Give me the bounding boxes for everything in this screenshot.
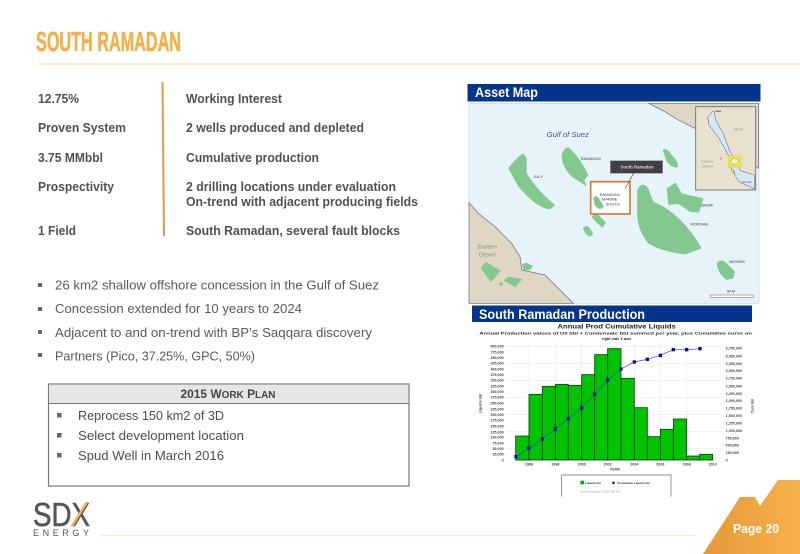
oil fields (481, 147, 735, 287)
left axis labels: 300,000 (490, 390, 504, 394)
key facts table: 12.75% (38, 92, 79, 106)
line: cumulative liquids (514, 347, 702, 458)
left axis labels: 25,000 (492, 453, 504, 457)
bullet list: Concession extended for 10 years to 2024 (55, 301, 302, 316)
left axis labels: 150,000 (490, 425, 504, 429)
key facts table: Proven System (38, 121, 126, 135)
chart title: Annual Prod Cumulative Liquids (557, 324, 677, 330)
right axis labels (726, 346, 742, 462)
sea label: Gulf of Suez (547, 130, 589, 139)
highlight box: Ramadan Marine South (591, 182, 630, 214)
key facts table: Prospectivity (38, 180, 114, 194)
grid (507, 343, 722, 460)
panel: 2015 work plan: Reprocess 150 km2 of 3D (78, 409, 224, 423)
bullet list (38, 278, 379, 364)
work plan heading: 2015 WORK PLAN (180, 387, 276, 401)
right axis labels: 500,000 (726, 444, 739, 448)
asset map (469, 103, 759, 303)
key facts table: 2 wells produced and depleted (186, 121, 364, 135)
right axis labels: 3,750,000 (726, 346, 742, 350)
inset map: Red Sea (742, 182, 752, 184)
right axis labels: 750,000 (726, 436, 739, 440)
axis titles: Cum bbl (751, 399, 755, 413)
left axis labels: 175,000 (490, 419, 504, 423)
left axis labels: 425,000 (490, 362, 504, 366)
title: SOUTH RAMADAN (36, 26, 181, 57)
production chart (479, 324, 755, 497)
scale bar: 5KM (727, 289, 735, 294)
field labels: RAMADAN (581, 156, 601, 161)
asset map heading: Asset Map (475, 85, 538, 100)
left axis labels: 75,000 (492, 441, 504, 445)
right axis labels: 250,000 (726, 451, 739, 455)
left axis labels: 375,000 (490, 373, 504, 377)
x axis labels: 2000 (578, 462, 586, 466)
axis titles: Liquids bbl (479, 394, 483, 413)
vertical orange divider (162, 82, 165, 236)
land: Eastern Desert: Eastern (478, 244, 497, 250)
right axis labels: 1,500,000 (726, 414, 742, 418)
field labels (533, 156, 745, 264)
inset map: Desert (702, 165, 713, 169)
left axis labels: 800,000 (490, 345, 504, 349)
key facts table: South Ramadan, several fault blocks (186, 224, 400, 238)
right axis labels: 0 (726, 458, 728, 462)
field labels: JULY (533, 174, 543, 179)
callout: South Ramadan: South Ramadan (621, 164, 654, 169)
left axis labels: 275,000 (490, 396, 504, 400)
x axis labels: 2006 (656, 462, 664, 466)
right axis labels: 3,500,000 (726, 355, 742, 359)
production heading (472, 306, 752, 322)
legend: Cumulative Liquids bbl (617, 481, 650, 485)
highlight box: Ramadan Marine South: SOUTH (606, 201, 620, 206)
asset map heading (468, 84, 760, 102)
right axis labels: 2,250,000 (726, 392, 742, 396)
chart title: Annual Production values of Oil bbl + Condensate bbl summed per year, plus Cumulative curve on (479, 332, 753, 336)
inset map (696, 107, 756, 190)
logo: SDX Energy: ENERGY (33, 528, 89, 538)
bars: annual production (516, 349, 713, 460)
land: Sinai (648, 103, 758, 168)
land: Eastern Desert: Desert (479, 253, 496, 259)
legend: Liquids bbl (585, 481, 601, 485)
right axis labels: 1,000,000 (726, 429, 742, 433)
right axis labels: 3,000,000 (726, 369, 742, 373)
land: Eastern Desert (469, 203, 573, 303)
panel: 2015 work plan (48, 384, 409, 486)
field labels: NESSIM (729, 259, 745, 264)
left axis labels: 325,000 (490, 384, 504, 388)
x axis labels: YEAR (610, 468, 620, 472)
left axis labels: 125,000 (490, 430, 504, 434)
panel: 2015 work plan: Spud Well in March 2016 (78, 449, 224, 463)
right axis labels: 1,250,000 (726, 422, 742, 426)
x axis labels: 2004 (630, 462, 639, 466)
left axis labels (490, 345, 504, 462)
right axis labels: 2,500,000 (726, 385, 742, 389)
callout: South Ramadan (610, 161, 663, 189)
chart title (479, 324, 753, 341)
panel: 2015 work plan: Select development location (78, 429, 244, 443)
left axis labels: 200,000 (490, 413, 504, 417)
key facts table: 2 drilling locations under evaluation (186, 180, 396, 194)
right axis labels: 1,750,000 (726, 407, 742, 411)
left axis labels: 50,000 (492, 447, 504, 451)
left axis labels: 400,000 (490, 367, 504, 371)
x axis labels: 2002 (604, 462, 612, 466)
highlight box: Ramadan Marine South: MARINE (602, 197, 618, 202)
key facts table: On-trend with adjacent producing fields (186, 195, 418, 209)
page number corner (703, 480, 800, 554)
x axis labels: 2008 (683, 462, 691, 466)
left axis labels: 225,000 (490, 407, 504, 411)
key facts table: 3.75 MMbbl (38, 151, 103, 165)
bullet list: 26 km2 shallow offshore concession in the Gulf of Suez (55, 278, 379, 292)
inset map: Eastern (701, 159, 714, 163)
inset map: Sinai (734, 127, 743, 132)
key facts table (38, 92, 418, 238)
left axis labels: 250,000 (490, 401, 504, 405)
right axis labels: 2,000,000 (726, 399, 742, 403)
field labels: BADRI (701, 202, 714, 207)
legend (562, 475, 671, 497)
production heading: South Ramadan Production (479, 307, 645, 322)
legend: Total production 3,707,085 bbl (580, 490, 620, 494)
page number corner: Page 20 (733, 522, 779, 536)
key facts table: Cumulative production (186, 151, 319, 165)
right axis labels: 3,250,000 (726, 362, 742, 366)
left axis labels: 0 (502, 458, 504, 462)
field labels: MORGAN (690, 222, 708, 227)
bullet list: Partners (Pico, 37.25%, GPC, 50%) (55, 348, 255, 364)
x axis labels: 1998 (551, 462, 559, 466)
left axis labels: 775,000 (490, 350, 504, 354)
highlight box: Ramadan Marine South: RAMADAN (600, 192, 620, 197)
x axis labels: 1996 (525, 462, 533, 466)
right axis labels: 2,750,000 (726, 376, 742, 380)
left axis labels: 100,000 (490, 436, 504, 440)
chart title: right side Y-axis (602, 337, 631, 341)
inset map: Suez (716, 111, 722, 113)
scale bar (710, 289, 753, 297)
bullet list: Adjacent to and on-trend with BP’s Saqqara discovery (55, 325, 373, 340)
left axis labels: 350,000 (490, 379, 504, 383)
logo: SDX Energy: SDX (33, 496, 90, 533)
x axis labels: 2010 (709, 462, 717, 466)
key facts table: Working Interest (186, 92, 283, 106)
axis titles (479, 394, 755, 413)
x axis labels (525, 462, 717, 472)
left axis labels: 450,000 (490, 356, 504, 360)
key facts table: 1 Field (38, 224, 76, 238)
